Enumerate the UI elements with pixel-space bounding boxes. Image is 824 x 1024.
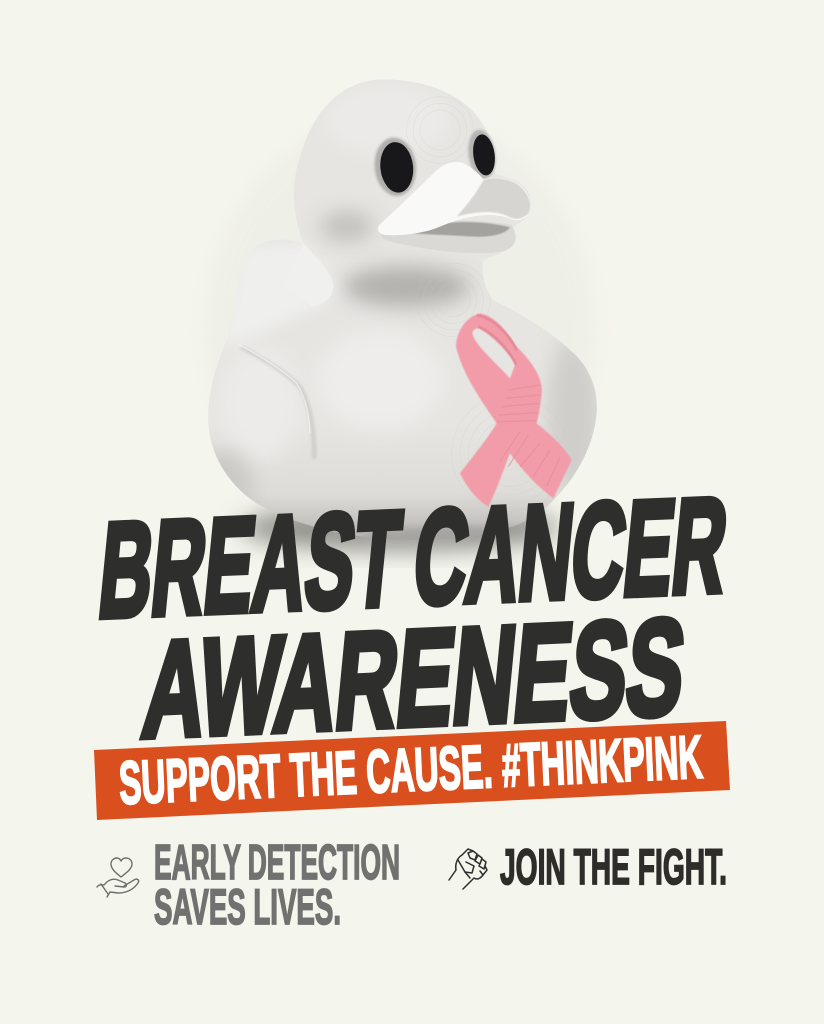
duck illustration bbox=[193, 79, 600, 550]
banner shape bbox=[94, 721, 730, 820]
text: early detection: EARLY DETECTION bbox=[154, 836, 400, 890]
ribbon stripes bbox=[497, 385, 560, 487]
concentric print rings bbox=[406, 96, 496, 448]
icon: raised fist bbox=[449, 849, 487, 889]
shading on the duck bbox=[193, 87, 600, 550]
wing highlight bbox=[230, 244, 334, 338]
duck body and head bbox=[193, 79, 600, 550]
lower beak and mouth bbox=[381, 220, 516, 253]
icon: hand holding heart bbox=[97, 858, 139, 897]
wing crease bbox=[238, 344, 314, 459]
text: early detection bbox=[154, 836, 400, 935]
text: early detection: SAVES LIVES. bbox=[154, 879, 341, 935]
left eye bbox=[372, 135, 419, 198]
orange banner bbox=[94, 721, 730, 820]
right eye bbox=[465, 128, 499, 180]
upper beak bbox=[378, 162, 531, 235]
pink ribbon bbox=[456, 313, 572, 507]
duck drop shadow bbox=[205, 115, 595, 550]
